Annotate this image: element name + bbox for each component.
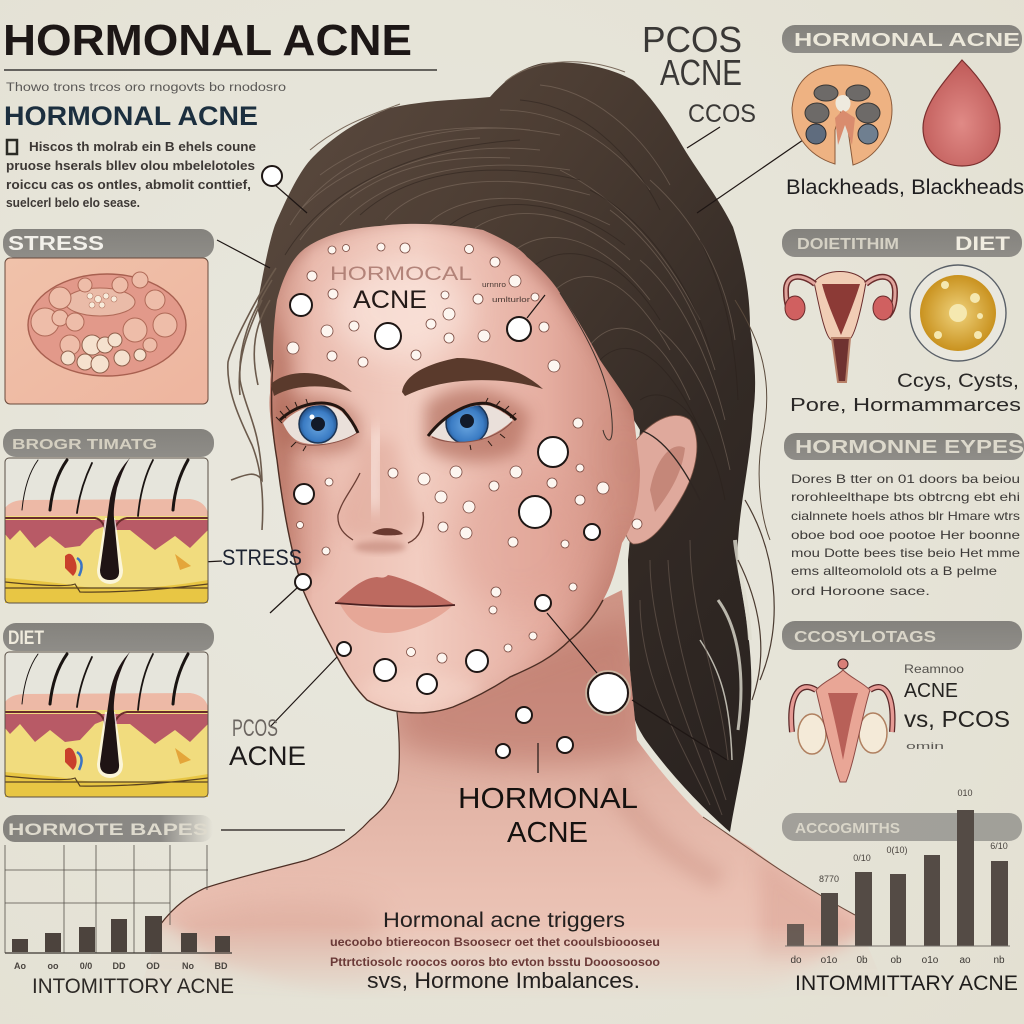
caption: cysts [790, 371, 1021, 415]
panel: right bar chart: INTOMMITTARY ACNE [795, 972, 1018, 995]
text block: rorohleelthape bts obtrcng ebt ehi [791, 490, 1020, 504]
label: pcos acne [229, 715, 306, 771]
icon: petri dish [910, 265, 1006, 361]
panel: right bar chart: 0/10 [853, 853, 871, 863]
heading: pcos acne: ACNE [660, 52, 742, 93]
panel: right bar chart: nb [993, 955, 1005, 966]
intro text block: Hiscos th molrab ein B ehels coune [29, 140, 256, 154]
face label: hormonal acne [330, 264, 531, 314]
label: stress: STRESS [222, 545, 302, 570]
stress heading pill [3, 229, 214, 258]
panel: left bar chart: Ao [14, 961, 26, 971]
panel: diet right [782, 229, 1022, 415]
connector lines [183, 127, 803, 830]
hair: back mass and ponytail [257, 62, 774, 832]
heading pill [3, 429, 214, 457]
heading pill [3, 815, 213, 842]
face label: hormonal acne: HORMOCAL [330, 264, 472, 285]
heading: pcos acne: CCOS [688, 100, 756, 128]
panel: left bar chart: 0/0 [80, 961, 92, 971]
panel: left bar chart: DD [112, 961, 126, 971]
panel: left bar chart: oo [48, 961, 59, 971]
intro text block: Thowo trons trcos oro rnogovts bo rnodosro [6, 82, 286, 94]
panel: hormone types [784, 433, 1024, 598]
caption: acne vs pcos: ACNE [904, 680, 958, 702]
panel: left bar chart [3, 815, 234, 998]
skin lesion illustration [28, 272, 186, 376]
skin cross-section [5, 652, 208, 797]
intro text block: roiccu cas os ontles, abmolit conttief, [6, 178, 251, 192]
text block: ems allteomolold ots a B pelme [791, 564, 997, 578]
bars [787, 810, 1008, 946]
caption: acne vs pcos [904, 662, 1010, 751]
intro text block: pruose hserals bllev olou mbelelotoles [6, 159, 255, 173]
label: pcos acne: ACNE [229, 741, 306, 771]
right eye [428, 398, 516, 450]
intro text block: suelcerl belo elo sease. [6, 196, 140, 210]
panel: right bar chart: 010 [957, 788, 973, 798]
heading pill [782, 813, 1022, 841]
bottom caption: svs, Hormone Imbalances. [367, 968, 640, 993]
bars [12, 916, 230, 952]
bottom caption: Hormonal acne triggers [383, 909, 625, 932]
stress heading pill: STRESS [8, 233, 104, 255]
panel: right bar chart: ob [890, 955, 902, 966]
panel: left bar chart: No [182, 961, 194, 971]
bottom caption: Pttrtctiosolc roocos ooros bto evton bsstu Dooosoosoo [330, 955, 660, 969]
heading pill: DIET [8, 628, 44, 649]
panel: right bar chart: o1o [922, 955, 939, 966]
caption: acne vs pcos: Reamnoo [904, 662, 964, 676]
neck label: hormonal acne: ACNE [507, 817, 588, 849]
heading pill: HORMONAL ACNE [794, 30, 1020, 50]
heading pill: DOIETITHIM [797, 236, 899, 253]
bottom caption: uecoobo btiereocon Bsoosecr oet thet cooulsbioooseu [330, 935, 660, 949]
heading: pcos acne [642, 19, 756, 128]
eyebrows [271, 358, 543, 396]
panel: brogr tmatg [3, 429, 214, 603]
heading pill [782, 229, 1022, 257]
icon: uterus [785, 272, 895, 382]
panel: right bar chart: o1o [821, 955, 838, 966]
nose [338, 430, 423, 553]
heading pill [782, 621, 1022, 650]
heading pill [784, 433, 1024, 460]
bottom caption [330, 909, 660, 993]
panel: left bar chart: BD [214, 961, 228, 971]
acne spots: large [262, 166, 630, 758]
neck and shoulders [162, 590, 860, 986]
heading pill [3, 623, 214, 651]
heading pill: CCOSYLOTAGS [794, 629, 936, 646]
face [270, 224, 640, 714]
icon: ovary cross-section [792, 65, 892, 165]
heading pill: HORMONNE EYPES [795, 437, 1024, 457]
text block: Dores B tter on 01 doors ba beiou [791, 472, 1020, 486]
panel: right bar chart: 0(10) [886, 845, 908, 855]
caption: acne vs pcos: vs, PCOS [904, 706, 1010, 732]
panel: left bar chart: INTOMITTORY ACNE [32, 975, 234, 998]
caption: acne vs pcos: omin [906, 741, 944, 751]
neck label: hormonal acne: HORMONAL [458, 783, 638, 815]
face label: hormonal acne: urnnro [482, 282, 506, 289]
face label: hormonal acne: umlturlor [492, 297, 531, 304]
intro text block: HORMONAL ACNE [4, 101, 258, 131]
heading pill: BROGR TIMATG [12, 436, 157, 453]
portrait illustration: woman with acne [162, 61, 860, 986]
intro text block [4, 82, 286, 210]
text block: mou Dotte bees tise beio Het mme [791, 546, 1020, 560]
caption: cysts: Pore, Hormammarces [790, 395, 1021, 415]
acne spots: small [287, 243, 642, 663]
panel: right bar chart: 6/10 [990, 841, 1008, 851]
lips [335, 575, 455, 633]
caption: blackheads: Blackheads, Blackheads [786, 176, 1024, 199]
heading pill [782, 25, 1022, 53]
icon: uterus with ovaries [791, 659, 893, 782]
light gaps in ponytail [700, 540, 750, 760]
neck label: hormonal acne [458, 783, 638, 849]
heading pill: ACCOGMITHS [795, 820, 900, 837]
panel: stress [3, 229, 214, 404]
label: pcos acne: PCOS [232, 715, 278, 742]
panel: top right hormonal acne [782, 25, 1024, 199]
skin cross-section [5, 458, 208, 603]
heading pill: HORMOTE BAPES [8, 820, 208, 839]
panel: acne vs pcos [782, 621, 1022, 782]
panel: right bar chart: 8770 [819, 874, 839, 884]
panel: right bar chart: ao [959, 955, 971, 966]
face label: hormonal acne: ACNE [353, 286, 427, 314]
panel: diet [3, 623, 214, 797]
panel: right bar chart [782, 788, 1022, 995]
title: HORMONAL ACNE [3, 16, 412, 65]
heading: pcos acne: PCOS [642, 19, 742, 60]
panel: right bar chart: do [790, 955, 802, 966]
text block: oboe bod ooe pootoe Her boonne [791, 528, 1020, 542]
text block: cialnnete hoels athos blr Hmare wtrs [791, 509, 1020, 523]
left hair wisps [228, 268, 276, 530]
panel: right bar chart: 0b [856, 955, 868, 966]
text block [791, 472, 1020, 598]
ear [623, 415, 700, 544]
panel: left bar chart: OD [146, 961, 160, 971]
caption: cysts: Ccys, Cysts, [897, 371, 1019, 392]
heading pill: DIET [955, 234, 1010, 255]
text block: ord Horoone sace. [791, 584, 930, 598]
icon: red drop [923, 60, 1000, 166]
left eye [276, 399, 358, 451]
